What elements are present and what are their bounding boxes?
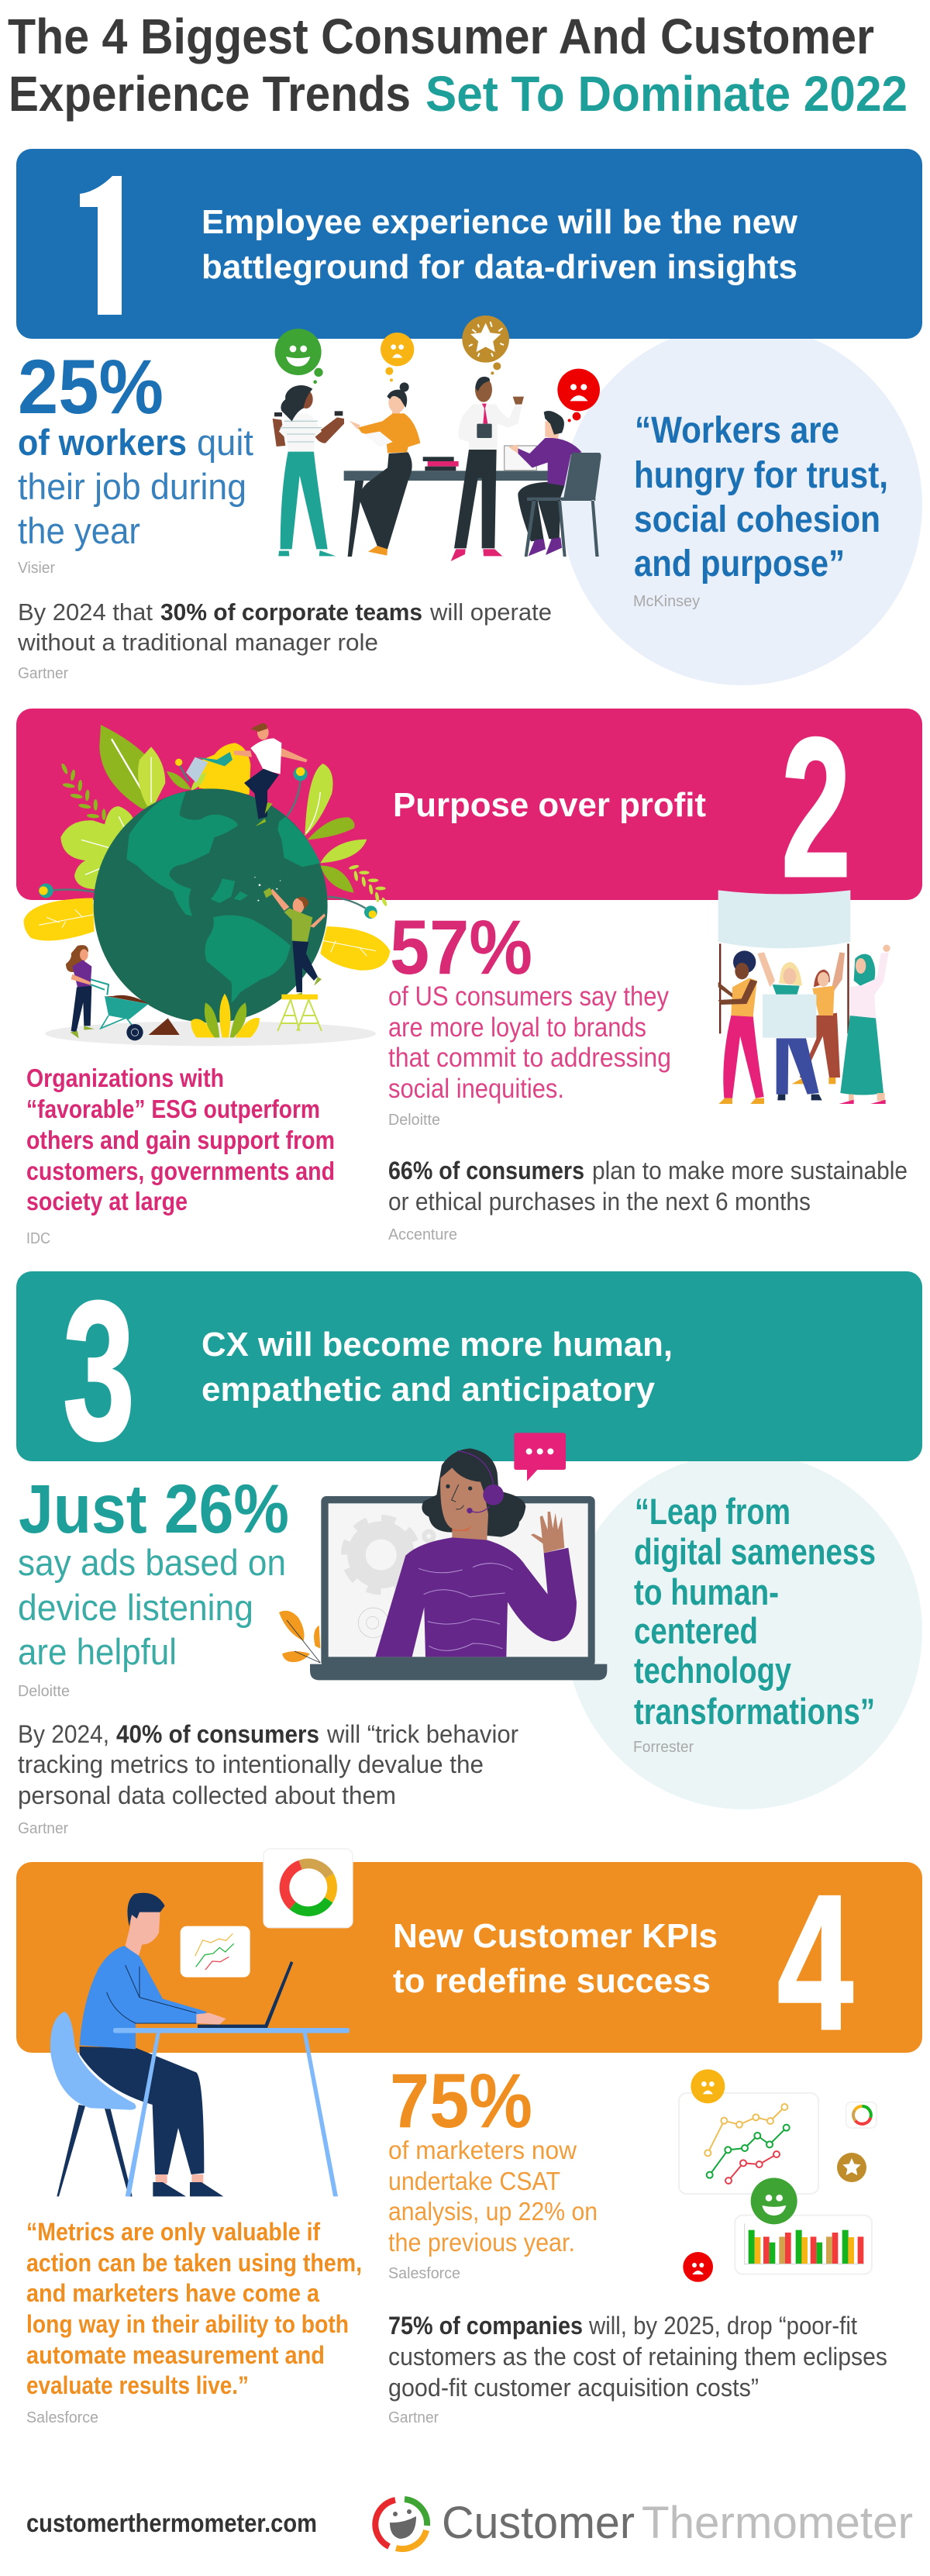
quote: McKinsey: hungry for trust, bbox=[634, 455, 888, 496]
illustration: globe and plants bbox=[24, 723, 390, 1046]
66% text bbox=[388, 1157, 908, 1243]
quote: McKinsey: and purpose” bbox=[634, 543, 845, 585]
stat 57%: that commit to addressing bbox=[388, 1043, 671, 1073]
quote: Forrester: Forrester bbox=[633, 1739, 694, 1756]
quote: Forrester: centered bbox=[634, 1610, 758, 1651]
stat just 26%: Just 26% bbox=[19, 1470, 289, 1547]
title: The 4 Biggest Consumer And Customer bbox=[8, 9, 874, 64]
footer bbox=[26, 2498, 913, 2549]
protester 2 with sign bbox=[757, 952, 822, 1100]
ESG statement bbox=[26, 1064, 335, 1247]
person: woman with clipboard bbox=[350, 382, 420, 556]
stat 57%: Deloitte bbox=[388, 1112, 440, 1129]
chair bbox=[525, 453, 601, 557]
person: wheelbarrow bbox=[66, 945, 180, 1040]
stat 25%: of workers bbox=[18, 422, 187, 463]
icon: red frown bbox=[683, 2252, 713, 2282]
illustration: agent on laptop bbox=[279, 1433, 607, 1680]
icon: green smile bbox=[751, 2178, 797, 2224]
person: watering can bbox=[186, 723, 308, 826]
stat 75%: 75% bbox=[390, 2057, 532, 2143]
laptop bbox=[310, 1496, 607, 1680]
icon: gold star bbox=[462, 316, 509, 374]
panel: trend 3 bbox=[16, 1260, 922, 1837]
quote: Forrester: technology bbox=[634, 1650, 791, 1691]
corporate teams text: 30% of corporate teams bbox=[160, 598, 422, 626]
75% of companies text: good-fit customer acquisition costs” bbox=[388, 2374, 759, 2402]
donut card bbox=[264, 1849, 353, 1928]
person: cleaning globe bbox=[254, 877, 326, 996]
ESG statement: others and gain support from bbox=[26, 1126, 335, 1154]
stat just 26% bbox=[18, 1470, 289, 1700]
stat 75%: undertake CSAT bbox=[388, 2167, 560, 2195]
75% of companies text: 75% of companies bbox=[388, 2312, 583, 2340]
banner 1 heading: battleground for data-driven insights bbox=[202, 248, 797, 286]
75% of companies text: Gartner bbox=[388, 2409, 439, 2426]
ESG statement: IDC bbox=[26, 1230, 50, 1247]
40% text: personal data collected about them bbox=[18, 1781, 396, 1809]
line chart card bbox=[181, 1926, 250, 1978]
line chart card bbox=[679, 2093, 818, 2194]
person: woman with cup bbox=[273, 385, 344, 556]
quote: Salesforce: and marketers have come a bbox=[26, 2279, 319, 2307]
ground shadow bbox=[45, 1021, 376, 1046]
ground plant bbox=[191, 994, 260, 1037]
corporate teams text: without a traditional manager role bbox=[17, 629, 378, 656]
ESG statement: Organizations with bbox=[26, 1064, 224, 1092]
person: seated man at laptop bbox=[505, 411, 582, 556]
number 4: 4 bbox=[777, 1854, 853, 2070]
banner 1 heading: Employee experience will be the new bbox=[202, 203, 798, 241]
stat just 26%: Deloitte bbox=[18, 1683, 70, 1700]
title: Set To Dominate 2022 bbox=[425, 66, 908, 122]
quote: Salesforce: Salesforce bbox=[26, 2409, 98, 2426]
corporate teams text bbox=[17, 598, 552, 682]
quote: Forrester: digital sameness bbox=[634, 1531, 876, 1572]
ESG statement: customers, governments and bbox=[26, 1157, 335, 1185]
seated man bbox=[80, 1893, 226, 2196]
number 1 bbox=[80, 176, 122, 315]
40% text: By 2024, bbox=[18, 1720, 109, 1748]
stat 75%: of marketers now bbox=[388, 2136, 577, 2164]
website: customerthermometer.com bbox=[26, 2509, 317, 2537]
stat 57%: social inequities. bbox=[388, 1074, 564, 1104]
illustration: protesters with banner bbox=[718, 890, 890, 1104]
icon: green smile bbox=[275, 329, 323, 384]
number 2: 2 bbox=[781, 697, 851, 919]
75% of companies text: customers as the cost of retaining them eclipses bbox=[388, 2343, 887, 2371]
stat 25%: the year bbox=[18, 510, 140, 551]
ESG statement: society at large bbox=[26, 1187, 188, 1216]
quote: Forrester bbox=[633, 1491, 876, 1756]
stat 75%: analysis, up 22% on bbox=[388, 2197, 598, 2226]
stat 25%: Visier bbox=[18, 560, 55, 577]
banner 1 bbox=[16, 149, 922, 339]
banner 4 bbox=[16, 1854, 922, 2070]
40% text: Gartner bbox=[18, 1820, 68, 1837]
protester 3 bbox=[792, 952, 845, 1084]
corporate teams text: By 2024 that bbox=[18, 598, 153, 626]
banner 4 heading: to redefine success bbox=[393, 1962, 711, 2000]
panel: trend 1 bbox=[16, 143, 922, 685]
agent woman bbox=[375, 1448, 577, 1657]
stat just 26%: device listening bbox=[18, 1587, 253, 1628]
person: man with tablet bbox=[451, 377, 524, 561]
quote: Salesforce: evaluate results live.” bbox=[26, 2371, 249, 2399]
banner 3 heading bbox=[202, 1326, 673, 1409]
laptop and desk bbox=[113, 1961, 350, 2196]
protester 4 bbox=[839, 945, 890, 1104]
small donut card bbox=[846, 2102, 877, 2128]
ladder bbox=[277, 995, 322, 1031]
illustration: man at desk bbox=[50, 1849, 353, 2196]
logo wordmark bbox=[442, 2498, 913, 2548]
quote: Salesforce: automate measurement and bbox=[26, 2341, 325, 2369]
stat 57%: of US consumers say they bbox=[388, 981, 669, 1012]
protest banner bbox=[718, 890, 850, 948]
orange leaves bbox=[279, 1611, 320, 1663]
banner 2 bbox=[16, 697, 922, 919]
icon: yellow frown bbox=[381, 333, 414, 381]
number 3: 3 bbox=[63, 1260, 135, 1481]
corporate teams text: will operate bbox=[429, 598, 552, 626]
banner 4 heading bbox=[393, 1917, 718, 2000]
stat just 26%: say ads based on bbox=[18, 1542, 286, 1583]
panel: trend 2 bbox=[16, 697, 922, 1247]
quote: Salesforce: action can be taken using them, bbox=[26, 2249, 362, 2277]
40% text bbox=[18, 1720, 518, 1837]
banner 3 bbox=[16, 1260, 922, 1481]
protester 1 bbox=[718, 950, 764, 1104]
logo wordmark: Thermometer bbox=[642, 2498, 913, 2548]
75% of companies text bbox=[388, 2312, 887, 2426]
logo wordmark: Customer bbox=[442, 2498, 635, 2548]
quote: McKinsey: “Workers are bbox=[635, 410, 839, 451]
stat 25%: quit bbox=[197, 422, 253, 463]
corporate teams text: Gartner bbox=[18, 665, 68, 682]
40% text: will “trick behavior bbox=[326, 1720, 518, 1748]
gears bbox=[345, 1519, 433, 1638]
banner poles bbox=[719, 943, 849, 1033]
40% text: tracking metrics to intentionally devalue the bbox=[18, 1750, 484, 1778]
icon: yellow frown bbox=[691, 2069, 725, 2103]
40% text: 40% of consumers bbox=[116, 1720, 319, 1748]
banner 3 heading: empathetic and anticipatory bbox=[202, 1371, 656, 1409]
globe bbox=[94, 788, 328, 1022]
quote circle background bbox=[566, 1453, 922, 1809]
illustration: metrics dashboard bbox=[679, 2069, 877, 2282]
quote: McKinsey: social cohesion bbox=[634, 499, 880, 540]
stat 25%: 25% bbox=[18, 343, 164, 429]
banner 3 heading: CX will become more human, bbox=[202, 1326, 673, 1364]
title: Experience Trends bbox=[9, 66, 411, 122]
stat 57% bbox=[388, 904, 671, 1129]
66% text: or ethical purchases in the next 6 months bbox=[388, 1188, 811, 1216]
stat 57%: are more loyal to brands bbox=[388, 1012, 646, 1043]
quote: Forrester: to human- bbox=[634, 1571, 779, 1612]
stat 75%: Salesforce bbox=[388, 2265, 460, 2282]
banner 2 heading: Purpose over profit bbox=[393, 786, 706, 824]
chair bbox=[50, 2012, 136, 2196]
banner 1 heading bbox=[202, 203, 798, 286]
quote circle background bbox=[561, 324, 922, 685]
quote: Salesforce bbox=[26, 2218, 362, 2426]
table with books bbox=[344, 457, 550, 557]
ESG statement: “favorable” ESG outperform bbox=[26, 1095, 320, 1123]
icon: red frown bbox=[557, 369, 600, 422]
66% text: 66% of consumers bbox=[388, 1157, 584, 1185]
stat 57%: 57% bbox=[390, 904, 532, 990]
stat 75%: the previous year. bbox=[388, 2228, 575, 2257]
quote: Salesforce: “Metrics are only valuable if bbox=[26, 2218, 320, 2246]
quote: Salesforce: long way in their ability to both bbox=[26, 2310, 349, 2338]
flowers bbox=[53, 764, 366, 1016]
stat 25%: their job during bbox=[18, 466, 246, 507]
quote: McKinsey: McKinsey bbox=[633, 593, 700, 610]
66% text: Accenture bbox=[388, 1226, 457, 1243]
speech bubble bbox=[514, 1433, 566, 1481]
66% text: plan to make more sustainable bbox=[592, 1157, 908, 1185]
75% of companies text: will, by 2025, drop “poor-fit bbox=[588, 2312, 857, 2340]
plants behind globe bbox=[24, 725, 390, 971]
stat 75% bbox=[388, 2057, 598, 2282]
quote: Forrester: transformations” bbox=[634, 1691, 875, 1732]
illustration: team at a table bbox=[273, 316, 601, 561]
panel: trend 4 bbox=[16, 1849, 922, 2426]
quote: Forrester: “Leap from bbox=[635, 1491, 790, 1532]
title bbox=[8, 9, 908, 122]
number 1: 1 bbox=[72, 143, 129, 355]
banner 4 heading: New Customer KPIs bbox=[393, 1917, 718, 1955]
stat just 26%: are helpful bbox=[18, 1631, 177, 1672]
logo icon bbox=[375, 2499, 427, 2549]
quote: McKinsey bbox=[633, 410, 888, 610]
icon: gold star bbox=[837, 2153, 866, 2182]
bar chart card bbox=[735, 2216, 872, 2274]
stat 25% bbox=[18, 343, 253, 577]
